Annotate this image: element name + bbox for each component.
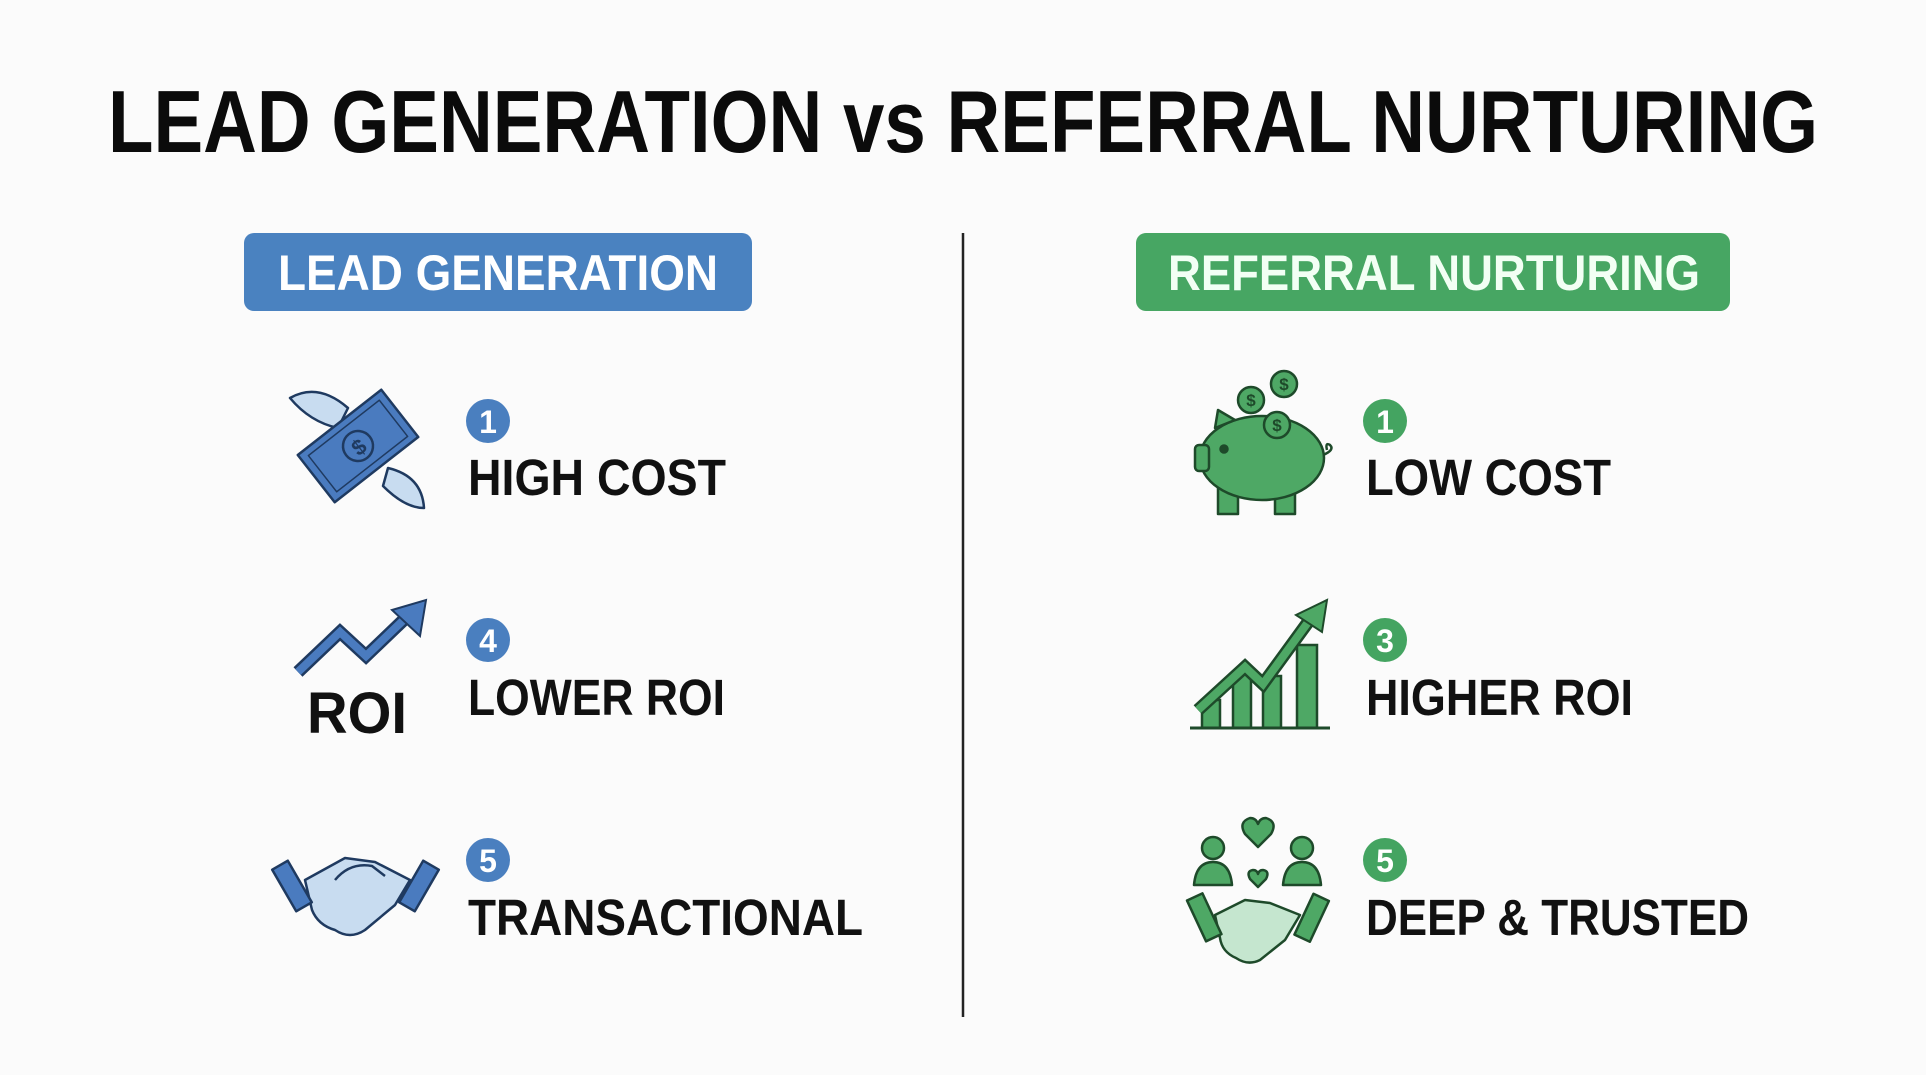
icon: flying money: $ xyxy=(346,434,371,461)
icon: flying money xyxy=(290,390,424,508)
badge 5 green: 5 xyxy=(1376,843,1394,879)
icon: piggy bank: $ xyxy=(1279,375,1289,394)
badge 5 blue xyxy=(466,838,510,882)
icon: piggy bank: $ xyxy=(1272,416,1282,435)
header: lead generation: LEAD GENERATION xyxy=(278,245,718,301)
label: deep and trusted: DEEP & TRUSTED xyxy=(1366,889,1749,946)
badge 1 blue xyxy=(466,399,510,443)
icon: handshake blue xyxy=(272,858,439,935)
badge 3 green: 3 xyxy=(1376,623,1394,659)
badge 5 green xyxy=(1363,838,1407,882)
badge 3 green xyxy=(1363,618,1407,662)
icon: people handshake xyxy=(1187,818,1329,963)
badge 1 green xyxy=(1363,399,1407,443)
badge 4 blue: 4 xyxy=(479,623,497,659)
icon: roi arrow: ROI xyxy=(307,681,407,746)
icon: roi arrow xyxy=(298,600,426,746)
header: lead generation xyxy=(244,233,752,311)
icon: piggy bank: $ xyxy=(1246,391,1256,410)
header: referral nurturing: REFERRAL NURTURING xyxy=(1168,245,1700,301)
divider xyxy=(962,233,964,1017)
icon: piggy bank xyxy=(1195,371,1331,514)
badge 4 blue xyxy=(466,618,510,662)
label: high cost: HIGH COST xyxy=(468,449,726,506)
label: lower roi: LOWER ROI xyxy=(468,669,725,726)
label: low cost: LOW COST xyxy=(1366,449,1611,506)
label: higher roi: HIGHER ROI xyxy=(1366,669,1633,726)
header: referral nurturing xyxy=(1136,233,1730,311)
badge 1 blue: 1 xyxy=(479,404,497,440)
badge 1 green: 1 xyxy=(1376,404,1394,440)
label: transactional: TRANSACTIONAL xyxy=(468,889,863,946)
badge 5 blue: 5 xyxy=(479,843,497,879)
icon: growth chart xyxy=(1190,600,1330,728)
